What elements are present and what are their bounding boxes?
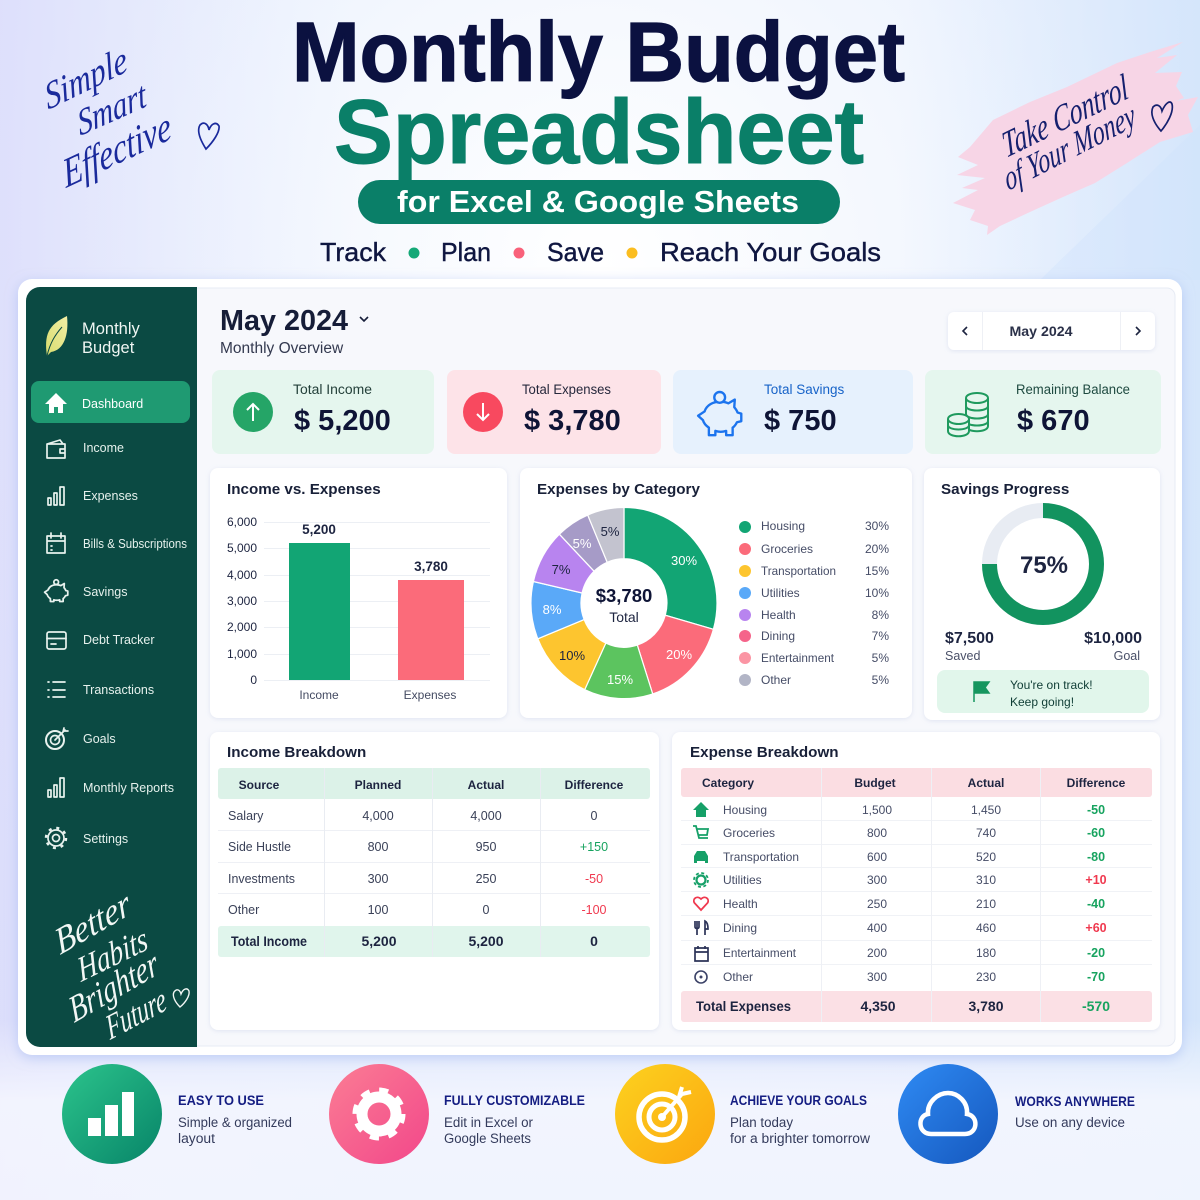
donut labels: 5%: [601, 524, 620, 539]
kpi: total savings: Total Savings: [764, 382, 845, 397]
donut legend: Health: [761, 608, 796, 622]
expense table: Other: [723, 970, 753, 984]
panel: savings progress: [924, 468, 1160, 720]
feature: works anywhere: Use on any device: [1015, 1115, 1125, 1130]
panel: income breakdown: Income Breakdown: [227, 744, 366, 761]
tagline: track plan save reach your goals: Plan: [441, 237, 491, 267]
donut labels: 8%: [543, 602, 562, 617]
expense table: 300: [867, 873, 887, 887]
donut labels: $3,780: [596, 585, 652, 606]
donut chart: [531, 507, 717, 699]
expense table: -70: [1087, 970, 1105, 984]
expense table: [681, 768, 1152, 1022]
expense table: Budget: [854, 776, 896, 790]
expense table: 250: [867, 897, 887, 911]
nav: income: Income: [83, 441, 124, 455]
panel: expenses by category: [520, 468, 912, 718]
income table: 0: [591, 809, 598, 823]
feature: works anywhere: [898, 1064, 1135, 1164]
title: Monthly Budget: [292, 5, 905, 99]
expense table: 200: [867, 946, 887, 960]
bar chart: 4,000: [227, 568, 257, 582]
title: Spreadsheet: [334, 82, 864, 183]
income table: Source: [239, 778, 280, 792]
donut labels: 20%: [666, 647, 692, 662]
subtitle pill: for Excel & Google Sheets: [397, 184, 799, 219]
donut labels: 10%: [559, 648, 585, 663]
expense table: -60: [1087, 826, 1105, 840]
expense table: 310: [976, 873, 996, 887]
nav: income: [47, 440, 124, 458]
nav: bills and subscriptions: Bills & Subscriptions: [83, 537, 187, 551]
donut labels: 5%: [573, 536, 592, 551]
expense table: 520: [976, 850, 996, 864]
handwritten note: better habits brighter future: [50, 882, 189, 1048]
expense table: Transportation: [723, 850, 799, 864]
handwritten note: better habits brighter future: Habits: [73, 919, 151, 990]
sidebar brand: Monthly: [82, 320, 141, 338]
feature: fully customizable: FULLY CUSTOMIZABLE: [444, 1092, 585, 1108]
expense table: +60: [1085, 921, 1107, 935]
expense table: 210: [976, 897, 996, 911]
nav: transactions: Transactions: [83, 683, 154, 697]
donut legend: [739, 519, 889, 687]
income table: 100: [368, 903, 388, 917]
nav: savings: Savings: [83, 585, 127, 599]
expense table: 740: [976, 826, 996, 840]
nav: settings: Settings: [83, 832, 128, 846]
month heading: May 2024: [220, 305, 348, 337]
expense row icons: [693, 802, 709, 983]
expense table: 1,450: [971, 803, 1001, 817]
income table: 5,200: [361, 933, 397, 949]
bar chart: 1,000: [227, 647, 257, 661]
income table: -100: [581, 903, 607, 917]
kpi: total savings: $ 750: [764, 405, 837, 437]
kpi: total expenses: Total Expenses: [522, 382, 611, 397]
tagline: track plan save reach your goals: Reach Your Goals: [660, 237, 881, 267]
expense table: -40: [1087, 897, 1105, 911]
saved and goal amounts: [945, 630, 1142, 663]
donut legend: Other: [761, 673, 791, 687]
kpi: total income: $ 5,200: [294, 405, 391, 437]
feature: works anywhere: WORKS ANYWHERE: [1015, 1093, 1135, 1109]
pink brush note: take control of your money: Take Control: [998, 66, 1132, 166]
feature: achieve your goals: Plan today: [730, 1115, 793, 1130]
expense table: 4,350: [860, 998, 896, 1014]
saved and goal amounts: $7,500: [945, 630, 994, 647]
income table: Investments: [228, 872, 295, 886]
income table: Difference: [565, 778, 624, 792]
income table: 0: [590, 933, 598, 949]
feature: easy to use: Simple & organized: [178, 1115, 292, 1130]
kpi: remaining balance: [925, 370, 1161, 454]
handwritten note: simple smart effective: Effective: [58, 102, 175, 197]
handwritten note: simple smart effective: Smart: [74, 73, 150, 144]
handwritten note: simple smart effective: [41, 39, 219, 197]
expense table: 300: [867, 970, 887, 984]
panel: expense breakdown: Expense Breakdown: [690, 744, 839, 761]
saved and goal amounts: $10,000: [1084, 630, 1142, 647]
nav: goals: [46, 728, 116, 749]
expense table: Total Expenses: [696, 998, 791, 1014]
panel: income vs expenses: Income vs. Expenses: [227, 481, 381, 498]
nav: debt tracker: Debt Tracker: [83, 633, 155, 647]
donut labels: [543, 524, 697, 687]
income table: 300: [368, 872, 388, 886]
income table: Other: [228, 903, 259, 917]
kpi: remaining balance: $ 670: [1017, 405, 1090, 437]
kpi: remaining balance: Remaining Balance: [1016, 382, 1130, 397]
income table: 4,000: [362, 809, 394, 823]
donut legend: 15%: [865, 564, 889, 578]
saved and goal amounts: Saved: [945, 649, 980, 663]
income table: 5,200: [468, 933, 504, 949]
handwritten note: better habits brighter future: Brighter: [64, 942, 164, 1031]
expense table: Actual: [968, 776, 1004, 790]
handwritten note: simple smart effective: Simple: [41, 39, 131, 119]
expense table: Difference: [1067, 776, 1126, 790]
donut legend: Dining: [761, 629, 795, 643]
bar chart: 3,000: [227, 594, 257, 608]
pink brush note: take control of your money: of Your Money: [1000, 96, 1140, 199]
income table: Side Hustle: [228, 840, 291, 854]
month heading: Monthly Overview: [220, 340, 344, 357]
donut labels: 30%: [671, 553, 697, 568]
handwritten note: better habits brighter future: Future: [101, 980, 171, 1048]
handwritten note: better habits brighter future: Better: [50, 882, 136, 963]
bar chart: 2,000: [227, 620, 257, 634]
kpi: total expenses: $ 3,780: [524, 405, 621, 437]
progress ring: [990, 510, 1096, 618]
bar chart: 5,000: [227, 541, 257, 555]
nav: bills and subscriptions: [47, 533, 187, 553]
nav: monthly reports: [48, 778, 174, 797]
donut legend: Transportation: [761, 564, 836, 578]
expense table: 1,500: [862, 803, 892, 817]
tagline: track plan save reach your goals: Track: [320, 237, 387, 267]
income table: 800: [368, 840, 388, 854]
donut legend: 5%: [872, 651, 889, 665]
kpi: total income: [212, 370, 434, 454]
income table: Salary: [228, 809, 264, 823]
nav: debt tracker: [47, 632, 155, 649]
expense table: 230: [976, 970, 996, 984]
expense table: 800: [867, 826, 887, 840]
panel: income vs expenses: [210, 468, 507, 718]
expense table: +10: [1085, 873, 1107, 887]
income table: 4,000: [470, 809, 502, 823]
donut legend: 5%: [872, 673, 889, 687]
expense table: Category: [702, 776, 754, 790]
sidebar brand: Budget: [82, 339, 135, 357]
expense table: Housing: [723, 803, 767, 817]
icon: leaf logo: [46, 316, 67, 356]
saved and goal amounts: Goal: [1114, 649, 1140, 663]
donut legend: 30%: [865, 519, 889, 533]
expense table: 600: [867, 850, 887, 864]
panel: expense breakdown: [672, 732, 1160, 1030]
pink brush note: take control of your money: [953, 42, 1198, 235]
expense table: -80: [1087, 850, 1105, 864]
donut labels: 15%: [607, 672, 633, 687]
feature: easy to use: EASY TO USE: [178, 1092, 264, 1108]
title: [292, 5, 905, 183]
nav: expenses: Expenses: [83, 489, 138, 503]
income table: +150: [580, 840, 608, 854]
tagline: track plan save reach your goals: [320, 237, 881, 267]
nav: savings: [45, 580, 127, 602]
expense table: Entertainment: [723, 946, 797, 960]
feature: achieve your goals: for a brighter tomorrow: [730, 1131, 870, 1146]
donut legend: 7%: [872, 629, 889, 643]
income table: 250: [476, 872, 496, 886]
nav: monthly reports: Monthly Reports: [83, 781, 174, 795]
callout: on track: You're on track!: [1010, 678, 1093, 692]
donut legend: Utilities: [761, 586, 800, 600]
progress ring: 75%: [1020, 552, 1068, 579]
kpi: total income: Total Income: [293, 382, 372, 397]
nav: dashboard active: Dashboard: [82, 397, 143, 411]
feature: achieve your goals: ACHIEVE YOUR GOALS: [730, 1092, 867, 1108]
donut legend: 20%: [865, 542, 889, 556]
donut labels: 7%: [552, 562, 571, 577]
callout: on track: [937, 670, 1149, 713]
feature: easy to use: [62, 1064, 292, 1164]
donut labels: Total: [609, 609, 639, 625]
nav: goals: Goals: [83, 732, 116, 746]
panel: savings progress: Savings Progress: [941, 481, 1069, 498]
kpi: total savings: [673, 370, 913, 454]
bar chart: Expenses: [404, 688, 456, 702]
feature: achieve your goals: [615, 1064, 870, 1164]
income table: Total Income: [231, 933, 307, 949]
income table: [218, 768, 650, 957]
income table: Planned: [355, 778, 401, 792]
bar chart: Income: [299, 688, 339, 702]
expense table: 3,780: [968, 998, 1004, 1014]
month heading: [220, 305, 368, 357]
bar chart: 0: [250, 673, 257, 687]
donut legend: 8%: [872, 608, 889, 622]
expense table: -570: [1082, 998, 1110, 1014]
donut legend: Housing: [761, 519, 805, 533]
income table: 0: [483, 903, 490, 917]
expense table: -50: [1087, 803, 1105, 817]
subtitle pill: [358, 180, 840, 224]
kpi: total expenses: [447, 370, 661, 454]
panel: sidebar: [26, 287, 197, 1048]
panel: income breakdown: [210, 732, 659, 1030]
feature: fully customizable: Edit in Excel or: [444, 1115, 534, 1130]
bar chart: 6,000: [227, 515, 257, 529]
sidebar brand: [82, 320, 141, 357]
donut legend: 10%: [865, 586, 889, 600]
feature: fully customizable: [329, 1064, 585, 1164]
date picker: [948, 312, 1155, 350]
income table: -50: [585, 872, 603, 886]
nav: expenses: [48, 487, 138, 505]
expense table: 460: [976, 921, 996, 935]
callout: on track: Keep going!: [1010, 695, 1074, 709]
income table: Actual: [468, 778, 504, 792]
expense table: 180: [976, 946, 996, 960]
expense table: Health: [723, 897, 758, 911]
donut legend: Entertainment: [761, 651, 835, 665]
feature: fully customizable: Google Sheets: [444, 1131, 531, 1146]
bar chart: 5,200: [302, 522, 336, 537]
expense table: Utilities: [723, 873, 762, 887]
expense table: -20: [1087, 946, 1105, 960]
nav: dashboard active: [31, 381, 190, 423]
expense table: Dining: [723, 921, 757, 935]
nav: settings: [46, 828, 128, 848]
date picker: May 2024: [1010, 323, 1073, 339]
income table: 950: [476, 840, 496, 854]
bar chart: 3,780: [414, 559, 448, 574]
feature: easy to use: layout: [178, 1131, 215, 1146]
dashboard card: [18, 279, 1182, 1055]
expense table: 400: [867, 921, 887, 935]
tagline: track plan save reach your goals: Save: [547, 237, 604, 267]
nav: transactions: [48, 682, 154, 697]
expense table: Groceries: [723, 826, 775, 840]
donut legend: Groceries: [761, 542, 813, 556]
bar chart: [227, 515, 490, 702]
panel: expenses by category: Expenses by Category: [537, 481, 700, 498]
